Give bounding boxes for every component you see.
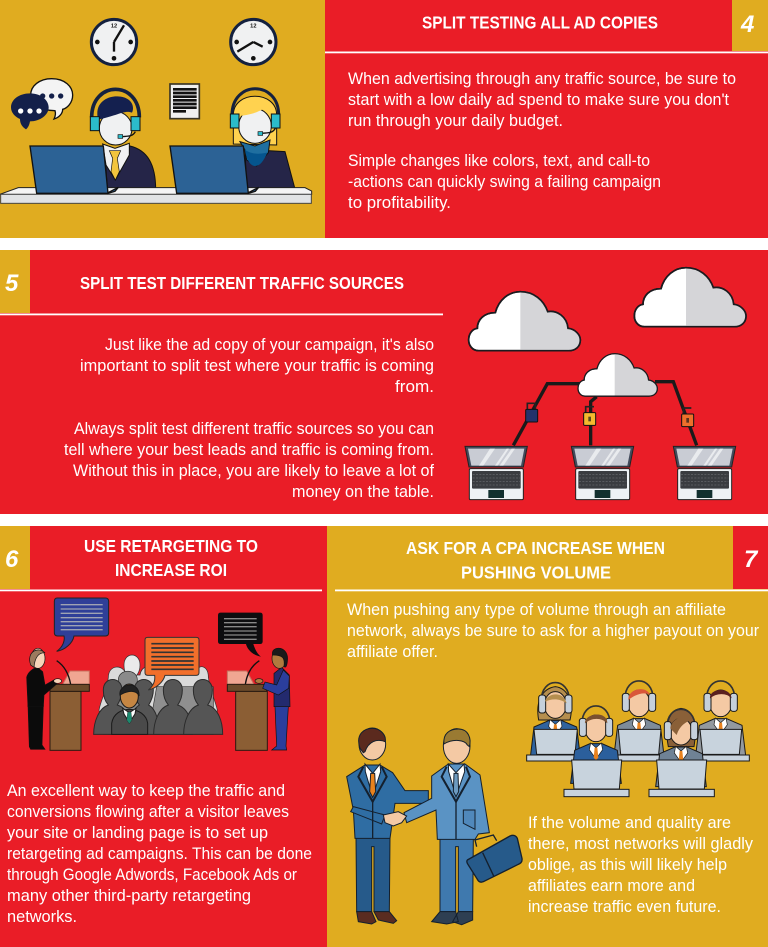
illustration: cloud network with laptops [465, 268, 746, 500]
panel 7: intro text: network, always be sure to ask for a higher payout on your [347, 622, 759, 640]
icon: left laptop [465, 446, 527, 500]
panel 6: header divider [0, 590, 322, 591]
panel 7: background [327, 526, 768, 947]
panel 5: number badge [0, 250, 30, 313]
panel 4: body text [348, 70, 736, 212]
icon: right clock [231, 19, 276, 65]
panel 6: heading: INCREASE ROI [115, 560, 227, 580]
panel 7: heading [406, 538, 665, 582]
panel 4: body text: to profitability. [348, 194, 451, 212]
panel 4: body text: When advertising through any traffic source, be sure to [348, 70, 736, 88]
handshake [383, 812, 407, 826]
panel 5: body text: important to split test where your traffic is coming [80, 357, 434, 375]
panel 4: number badge [732, 0, 768, 51]
panel 4: heading: SPLIT TESTING ALL AD COPIES [422, 12, 658, 32]
icon: speech bubbles [11, 79, 73, 129]
panel 6: background [0, 526, 327, 947]
panel 5: background [0, 250, 768, 514]
panel 5: body text: money on the table. [292, 483, 434, 501]
illustration: call center agents with clocks [0, 19, 312, 203]
illustration: affiliate team and handshake [347, 681, 749, 925]
panel 5: body text: Just like the ad copy of your campaign, it's also [105, 336, 434, 354]
panel 6: body text: retargeting ad campaigns. This can be done [7, 845, 312, 863]
panel 5: body text: Without this in place, you are likely to leave a lot of [73, 462, 434, 480]
panel 6: number badge [0, 526, 30, 589]
left speaker [27, 648, 62, 749]
front row laptops and desks [564, 760, 714, 797]
panel 4: text background [325, 0, 768, 238]
panel 7: heading: ASK FOR A CPA INCREASE WHEN [406, 538, 665, 558]
panel 7: number badge: 7 [744, 546, 759, 573]
panel 6: body text: networks. [7, 908, 77, 926]
panel 6: body text: your site or landing page is to set up [7, 824, 268, 842]
icon: right clock: 12 [250, 23, 256, 29]
icon: yellow lock [584, 407, 596, 425]
icon: navy lock [526, 403, 538, 422]
panel 6: body text [7, 782, 312, 926]
panel 5: body text [64, 336, 434, 501]
speech bubble: orange [145, 637, 199, 690]
panel 6: body text: many other third-party retargeting [7, 887, 251, 905]
icon: briefcase [467, 835, 522, 882]
panel 5: body text: from. [395, 378, 434, 396]
panel 5: body text: Always split test different traffic sources so you can [74, 420, 434, 438]
panel 6: heading [84, 536, 258, 580]
panel 7: closing text: affiliates earn more and [528, 877, 695, 895]
panel 7: intro text: affiliate offer. [347, 643, 438, 661]
panel 6: body text: conversions flowing after a visitor leaves [7, 803, 289, 821]
icon: right cloud [634, 268, 746, 327]
panel 7: number badge [733, 526, 768, 589]
panel 7: closing text: oblige, as this will likely help [528, 856, 727, 874]
icon: left clock: 12 [111, 23, 117, 29]
icon: orange lock [682, 408, 694, 427]
panel 5: header divider [0, 314, 443, 315]
icon: center cloud [578, 354, 657, 396]
panel 7: closing text: If the volume and quality are [528, 814, 731, 832]
agent: man with headset [90, 89, 156, 191]
audience front row [94, 679, 223, 734]
left laptop [30, 146, 118, 193]
right podium [227, 661, 267, 750]
speech bubble: black [218, 613, 263, 657]
panel 7: closing text: increase traffic even future. [528, 898, 721, 916]
agents: front row [571, 706, 706, 787]
right speaker [255, 648, 290, 750]
panel 6: body text: An excellent way to keep the traffic and [7, 782, 285, 800]
right laptop [170, 146, 259, 193]
panel 5: body text: tell where your best leads and traffic is coming from. [64, 441, 434, 459]
panel 5: heading: SPLIT TEST DIFFERENT TRAFFIC SOURCES [80, 273, 404, 293]
speech bubble: blue [54, 598, 109, 651]
agent: woman with headset [230, 89, 295, 189]
panel 7: closing text: there, most networks will gladly [528, 835, 754, 853]
icon: right laptop [673, 446, 736, 500]
illustration: speakers at podiums with audience [27, 598, 290, 750]
panel 7: heading: PUSHING VOLUME [461, 562, 611, 582]
panel 6: body text: through Google Adwords, Facebook Ads or [7, 866, 297, 884]
panel 7: intro text: When pushing any type of volume through an affiliate [347, 601, 726, 619]
panel 4: number badge: 4 [740, 11, 754, 38]
icon: left clock [91, 19, 137, 65]
panel 4: body text: run through your daily budget. [348, 112, 563, 130]
panel 5: number badge: 5 [5, 270, 19, 297]
panel 4: body text: start with a low daily ad spend to make sure you don't [348, 91, 729, 109]
icon: left cloud [469, 292, 580, 351]
businessman: left [347, 728, 428, 924]
desk [0, 188, 312, 203]
panel 7: header divider [335, 590, 768, 591]
audience member with green tie [112, 684, 148, 734]
icon: middle laptop [571, 446, 634, 500]
network wires [513, 382, 697, 445]
left podium [50, 661, 89, 750]
audience back rows [99, 655, 217, 734]
panel 4: body text: -actions can quickly swing a failing campaign [348, 173, 661, 191]
panel 6: heading: USE RETARGETING TO [84, 536, 258, 556]
panel 4: illustration background [0, 0, 325, 238]
panel 7: closing text [528, 814, 754, 916]
agents: back row [530, 681, 746, 760]
businessman: right [404, 729, 489, 925]
back row laptops and desk [527, 729, 749, 761]
panel 4: body text: Simple changes like colors, text, and call-to [348, 152, 650, 170]
panel 7: intro text [347, 601, 759, 661]
icon: wall note [170, 84, 199, 119]
panel 6: number badge: 6 [5, 546, 19, 573]
panel 4: header divider [325, 52, 768, 53]
